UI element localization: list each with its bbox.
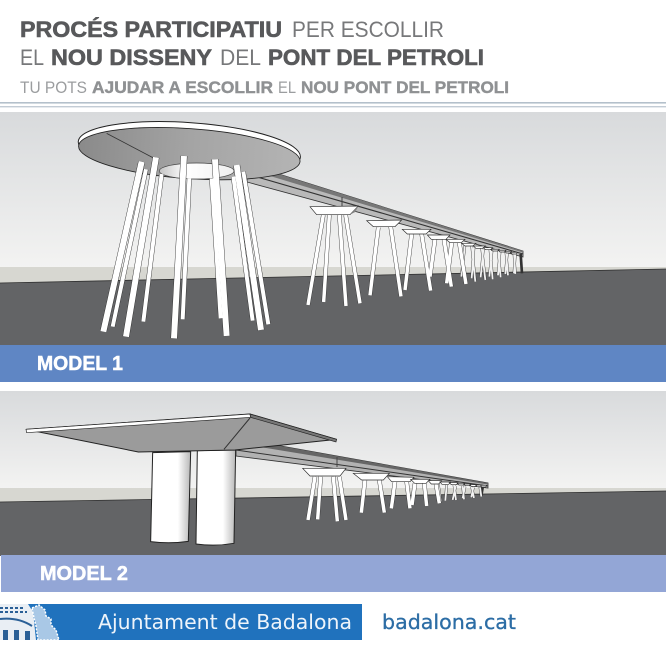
panel: model 2 render xyxy=(0,391,666,556)
deck: model 2 walkway xyxy=(236,438,488,488)
footer: Ajuntament de Badalona bar: Ajuntament de Badalona xyxy=(98,610,352,634)
title xyxy=(20,17,484,70)
cylinders xyxy=(151,450,236,545)
banner: model 1: MODEL 1 xyxy=(37,353,123,375)
title: PROCÉS PARTICIPATIU xyxy=(20,17,282,42)
slab xyxy=(26,414,337,452)
banner: model 2 xyxy=(1,555,666,592)
deck: model 1 walkway xyxy=(247,164,523,257)
subtitle xyxy=(20,79,509,97)
columns xyxy=(103,156,268,338)
title: PER ESCOLLIR xyxy=(292,17,444,42)
central hub xyxy=(159,163,234,179)
panel: model 1 render xyxy=(0,112,666,346)
icon: city crest xyxy=(0,604,59,640)
title: DEL xyxy=(220,45,261,70)
subtitle: AJUDAR A ESCOLLIR xyxy=(92,79,273,97)
piers: model 1 xyxy=(308,206,522,306)
website link: badalona.cat xyxy=(382,610,516,634)
title: PONT DEL PETROLI xyxy=(268,45,484,70)
title: NOU DISSENY xyxy=(51,45,212,70)
banner: model 1 xyxy=(0,345,666,382)
subtitle: TU POTS xyxy=(20,79,87,97)
platform: model 1 circular deck and columns xyxy=(76,115,302,338)
subtitle: NOU PONT DEL PETROLI xyxy=(301,79,509,97)
piers: model 2 xyxy=(303,468,487,521)
subtitle: EL xyxy=(278,79,296,97)
title: EL xyxy=(20,45,44,70)
footer: Ajuntament de Badalona bar xyxy=(0,604,362,640)
deck disc xyxy=(76,115,302,186)
platform: model 2 slab and cylinders xyxy=(26,414,337,545)
banner: model 2: MODEL 2 xyxy=(40,563,128,585)
